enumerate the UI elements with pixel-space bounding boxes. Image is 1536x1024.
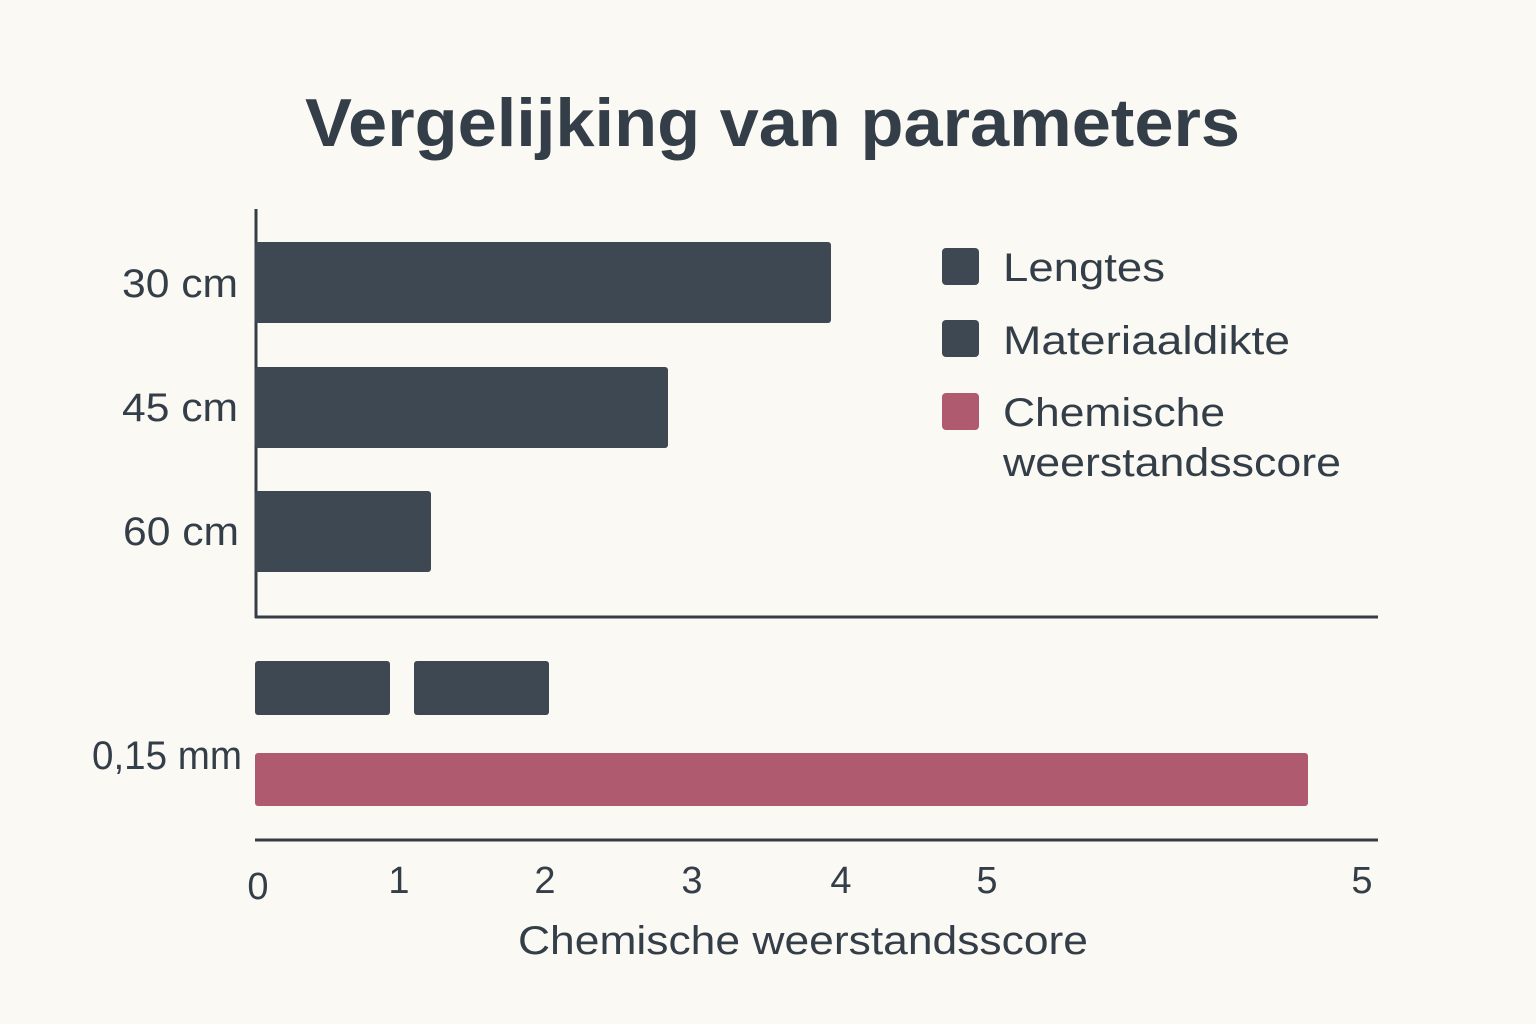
x axis ticks: 4: [830, 860, 852, 902]
x axis ticks: 5: [976, 860, 998, 902]
bar: 45 cm: [122, 367, 668, 448]
title: Vergelijking van parameters: [305, 85, 1240, 161]
small bars: [255, 661, 549, 715]
x axis ticks: 5: [1351, 860, 1373, 902]
x axis title: Chemische weerstandsscore: [518, 919, 1088, 963]
legend: weerstandsscore: [1002, 441, 1341, 485]
chart: [92, 209, 1378, 963]
x axis ticks: [247, 860, 1373, 908]
legend: Materiaaldikte: [1003, 319, 1290, 363]
x axis ticks: 2: [534, 860, 556, 902]
x axis ticks: 3: [681, 860, 703, 902]
bar: 60 cm: 60 cm: [123, 510, 239, 554]
x axis ticks: 0: [247, 866, 269, 908]
legend: [942, 246, 1341, 485]
bar: 60 cm: [123, 491, 431, 572]
bar: 0,15 mm: [92, 734, 1308, 806]
bar: 0,15 mm: 0,15 mm: [92, 734, 242, 778]
bar: 30 cm: 30 cm: [122, 262, 238, 306]
x axis ticks: 1: [388, 860, 410, 902]
bar: 45 cm: 45 cm: [122, 386, 238, 430]
bar: 30 cm: [122, 242, 831, 323]
legend: Chemische: [1003, 391, 1225, 435]
legend: Lengtes: [1003, 246, 1165, 290]
